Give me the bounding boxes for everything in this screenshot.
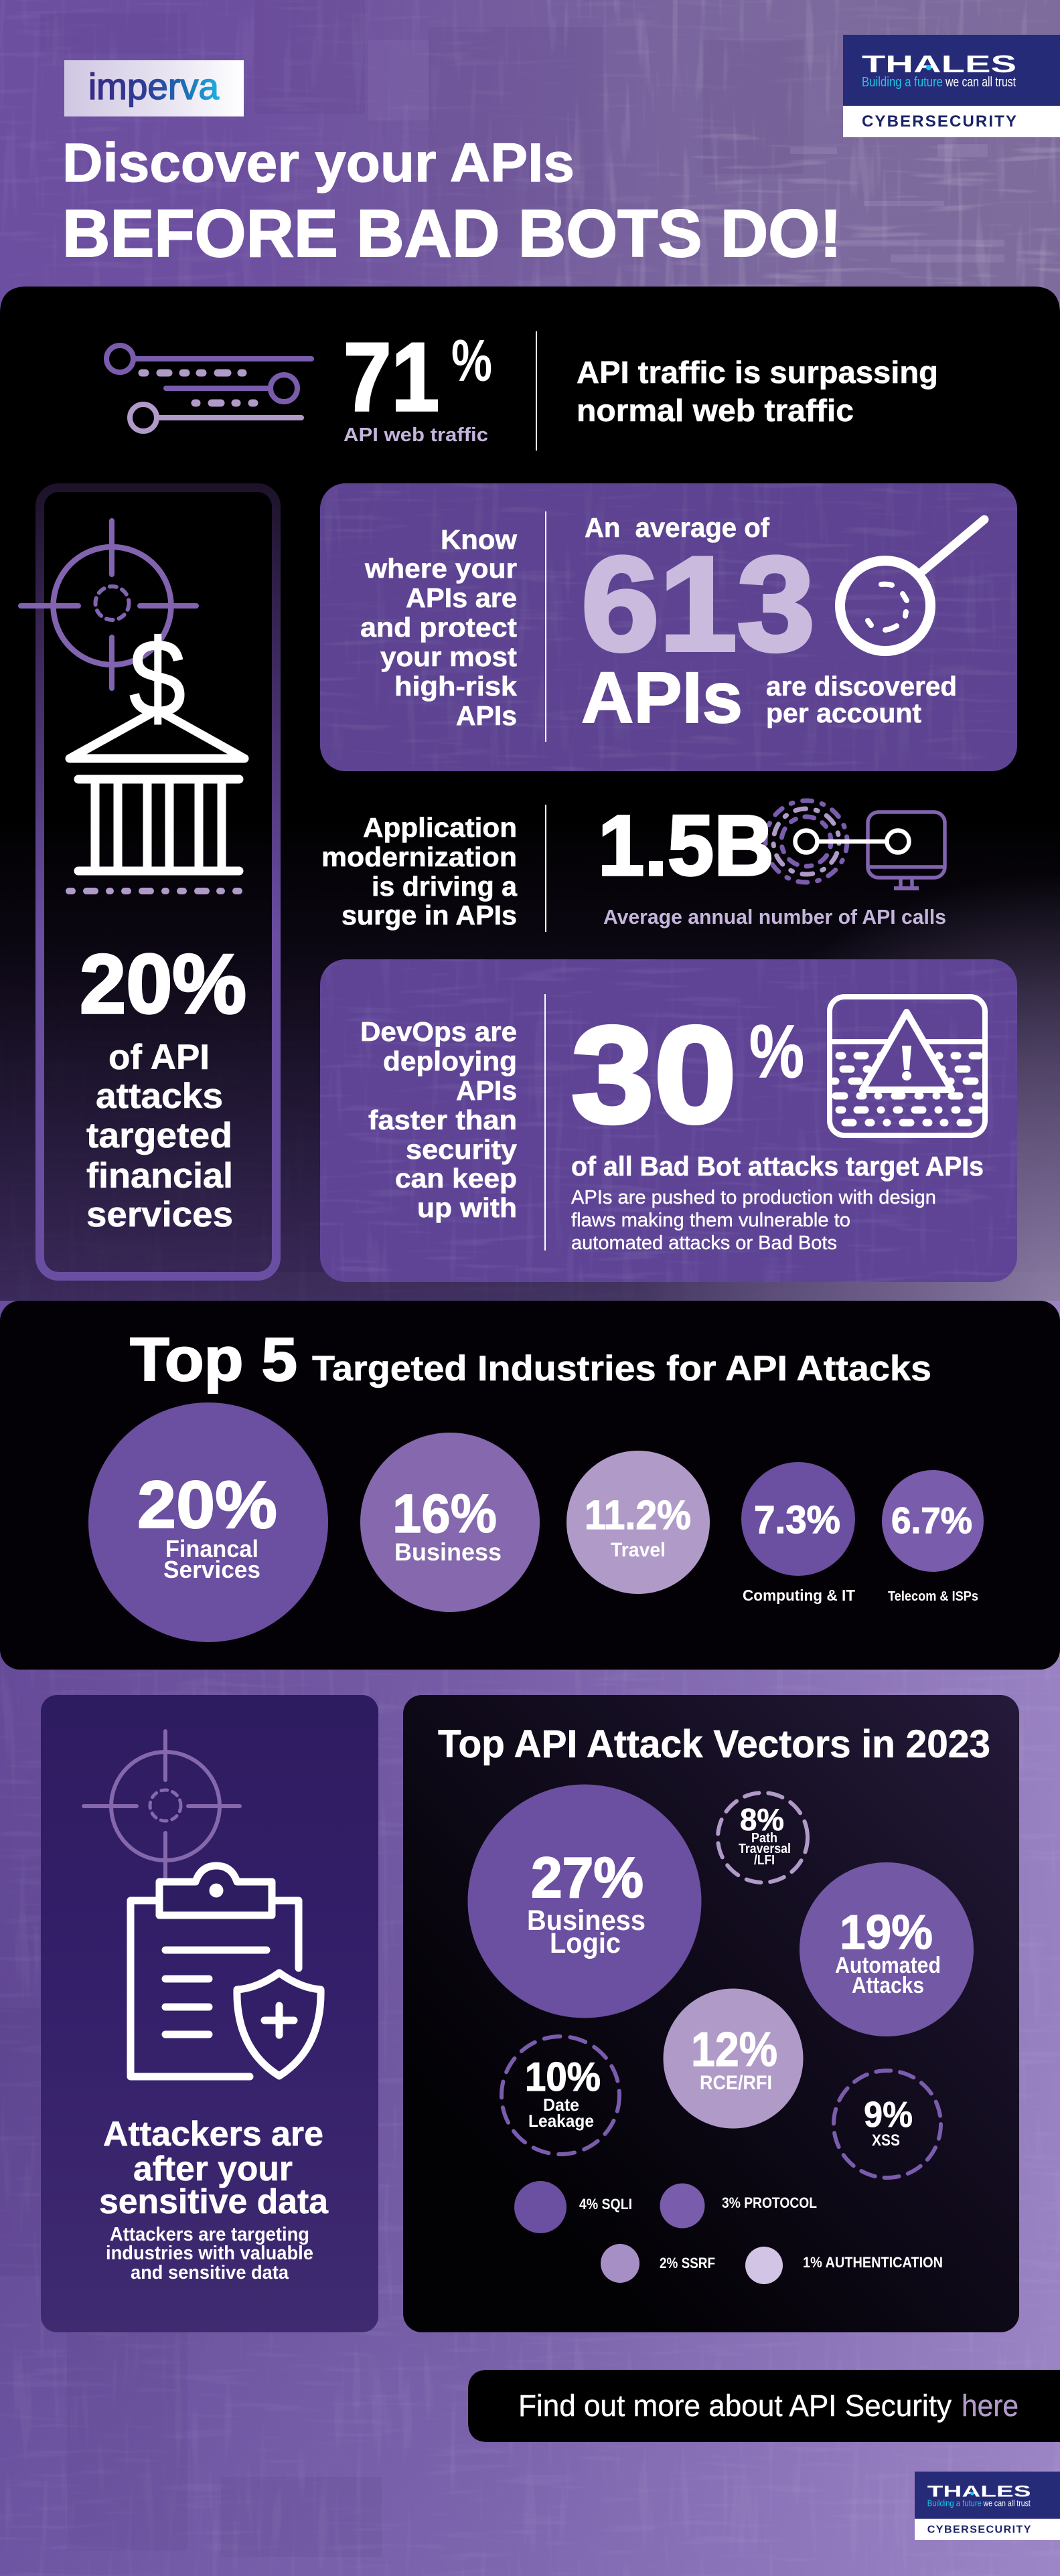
- circle: 6.7% telecom and ISPs: 6.7%: [891, 1500, 972, 1541]
- circle: 9% XSS: 9%: [864, 2095, 913, 2135]
- panel: 20% financial services: attacks: [96, 1076, 223, 1116]
- text: APIs pushed with design flaws: APIs are pushed to production with design: [571, 1187, 936, 1208]
- logo: Thales footer: Building a future: [927, 2498, 982, 2508]
- text: know where your APIs are: APIs: [456, 700, 517, 731]
- circle: 7.3% computing and IT: Computing & IT: [743, 1587, 855, 1604]
- text: know where your APIs are: high-risk: [394, 671, 517, 702]
- call to action: [468, 2370, 1060, 2442]
- stat: 71% API web traffic: API web traffic: [344, 424, 488, 446]
- row: 1.5B API calls: surge in APIs: [342, 900, 517, 931]
- stat: 71% API web traffic: API traffic is surpassing: [577, 355, 938, 390]
- legend: smaller vectors: 2% SSRF: [660, 2255, 715, 2271]
- stat: 71% API web traffic: normal web traffic: [577, 393, 854, 428]
- title: BEFORE BAD BOTS DO!: [62, 196, 842, 271]
- circle: 20% financial services: Services: [163, 1556, 260, 1583]
- panel: 613 APIs discovered: APIs: [581, 657, 743, 738]
- circle: 16% business: Business: [394, 1538, 502, 1566]
- panel: 613 APIs discovered: are discovered: [766, 671, 957, 702]
- logo: Thales footer: [915, 2472, 1060, 2540]
- circle: 10% data leakage: Date: [543, 2095, 579, 2115]
- panel: attackers sensitive data: [41, 1695, 378, 2332]
- heading: top 5: Targeted Industries for API Attacks: [312, 1349, 931, 1388]
- panel: attackers sensitive data: and sensitive data: [131, 2262, 289, 2283]
- circle: 8% path traversal: 8%: [740, 1802, 784, 1837]
- logo: Thales footer: THALES: [927, 2482, 1031, 2500]
- icon: clipboard with shield: [131, 1866, 321, 2077]
- circle: 20% financial services: Financal: [165, 1535, 258, 1562]
- logo: Thales cybersecurity: THALES: [862, 50, 1016, 78]
- text: devops are deploying: APIs: [456, 1075, 517, 1106]
- panel: top API attack vectors: Top API Attack Vectors in 2023: [438, 1722, 990, 1766]
- circle: 20% financial services: 20%: [137, 1467, 277, 1542]
- panel: 20% financial services: of API: [108, 1038, 210, 1077]
- panel: attackers sensitive data: Attackers are targeting: [110, 2224, 309, 2245]
- legend: smaller vectors: 4% SQLI: [579, 2196, 632, 2212]
- circle: 10% data leakage: 10%: [525, 2055, 601, 2099]
- panel: 20% financial services: [21, 487, 276, 1276]
- circle: 8% path traversal: /LFI: [754, 1853, 775, 1868]
- circle: 19% automated attacks: Automated: [835, 1953, 941, 1978]
- panel: 30% bad bot attacks: %: [749, 1010, 804, 1093]
- row: 1.5B API calls: [321, 798, 946, 932]
- icon: bank with dollar: $: [129, 617, 185, 740]
- circle: 10% data leakage: Leakage: [528, 2111, 594, 2131]
- panel: 613 APIs discovered: 613: [581, 530, 815, 679]
- circle: 9% XSS: XSS: [872, 2131, 900, 2150]
- text: devops are deploying: faster than: [368, 1105, 517, 1135]
- circle: 6.7% telecom and ISPs: Telecom & ISPs: [888, 1589, 978, 1604]
- logo: Thales cybersecurity: Building a future: [862, 75, 943, 90]
- panel: 30% bad bot attacks: [320, 959, 1017, 1282]
- row: 1.5B API calls: is driving a: [372, 871, 518, 902]
- circle: 10% data leakage: [502, 2036, 619, 2154]
- text: devops are deploying: security: [406, 1134, 517, 1165]
- panel: attackers sensitive data: industries with valuable: [106, 2243, 313, 2264]
- panel: attackers sensitive data: after your: [133, 2150, 293, 2188]
- circle: 20% financial services: [88, 1402, 328, 1642]
- panel: top 5 targeted industries: [0, 1301, 1060, 1670]
- logo: imperva: imperva: [88, 66, 219, 107]
- circle: 27% business logic: Logic: [550, 1927, 621, 1959]
- legend: smaller vectors: 3% PROTOCOL: [722, 2194, 817, 2211]
- legend: smaller vectors: 1% AUTHENTICATION: [803, 2254, 943, 2271]
- circle: 19% automated attacks: Attacks: [852, 1973, 924, 1998]
- circle: 8% path traversal: Traversal: [739, 1842, 791, 1856]
- stat: 71% API web traffic: 71: [344, 323, 439, 431]
- circle: 11.2% travel: 11.2%: [585, 1492, 691, 1538]
- logo: Thales footer: we can all trust: [983, 2498, 1031, 2508]
- text: APIs pushed with design flaws: [571, 1187, 936, 1254]
- panel: 20% financial services: 20%: [80, 938, 246, 1031]
- text: devops are deploying: [360, 1016, 517, 1223]
- panel: attackers sensitive data: sensitive data: [99, 2182, 329, 2221]
- circle: 27% business logic: Business: [527, 1905, 646, 1937]
- circle: 6.7% telecom and ISPs: [882, 1470, 984, 1604]
- icon: network to monitor: [765, 801, 945, 888]
- panel: 20% financial services: targeted: [86, 1116, 232, 1155]
- logo: Thales cybersecurity: we can all trust: [945, 75, 1016, 90]
- text: know where your APIs are: and protect: [360, 612, 517, 643]
- logo: Thales cybersecurity: [843, 35, 1060, 137]
- text: know where your APIs are: [360, 524, 517, 731]
- panel: 30% bad bot attacks: 30: [571, 998, 737, 1151]
- text: devops are deploying: deploying: [383, 1046, 517, 1076]
- panel: 20% financial services: services: [86, 1195, 233, 1234]
- circle: 11.2% travel: Travel: [611, 1539, 666, 1561]
- panel: 30% bad bot attacks: of all Bad Bot attacks target APIs: [571, 1151, 984, 1182]
- icon: magnifier: [840, 519, 984, 651]
- text: APIs pushed with design flaws: automated attacks or Bad Bots: [571, 1232, 837, 1254]
- icon: data connectors: [106, 345, 311, 431]
- icon: warning over code window: [830, 997, 985, 1135]
- circle: 16% business: 16%: [392, 1483, 497, 1544]
- panel: 613 APIs discovered: An average of: [585, 512, 769, 543]
- call to action: here: [962, 2389, 1018, 2423]
- circle: 9% XSS: [834, 2071, 941, 2178]
- heading: top 5: Top 5: [130, 1325, 297, 1394]
- circle: 19% automated attacks: 19%: [840, 1906, 933, 1959]
- circle: 7.3% computing and IT: [741, 1462, 855, 1604]
- stat: 71% API web traffic: [106, 323, 938, 451]
- panel: top black section: [0, 287, 1060, 1301]
- title: [62, 133, 842, 271]
- icon: bank with dollar: [69, 617, 244, 891]
- lower right glow of top section: [603, 870, 1060, 1301]
- panel: attackers sensitive data: Attackers are: [103, 2115, 323, 2154]
- circle: 16% business: [360, 1433, 540, 1612]
- circle: 12% RCE/RFI: [663, 1988, 804, 2129]
- circle: 12% RCE/RFI: RCE/RFI: [700, 2072, 772, 2094]
- row: 1.5B API calls: Average annual number of API calls: [603, 905, 946, 929]
- heading: top 5: [130, 1325, 931, 1394]
- icon: crosshair target: [21, 521, 196, 688]
- text: devops are deploying: up with: [417, 1192, 517, 1223]
- circle: 7.3% computing and IT: 7.3%: [754, 1498, 840, 1542]
- text: know where your APIs are: Know: [441, 524, 517, 555]
- logo: imperva: [64, 60, 244, 116]
- text: know where your APIs are: APIs are: [406, 582, 517, 613]
- panel: 613 APIs discovered: per account: [766, 698, 921, 728]
- panel: 20% financial services: financial: [86, 1156, 233, 1196]
- circle: 11.2% travel: [566, 1451, 710, 1594]
- text: devops are deploying: can keep: [395, 1163, 517, 1194]
- row: 1.5B API calls: Application: [363, 812, 517, 843]
- title: Discover your APIs: [62, 133, 575, 193]
- circle: 27% business logic: [467, 1785, 702, 2018]
- text: know where your APIs are: your most: [380, 641, 517, 672]
- row: 1.5B API calls: modernization: [321, 841, 517, 872]
- panel: top API attack vectors: [403, 1695, 1019, 2332]
- row: 1.5B API calls: 1.5B: [598, 798, 774, 894]
- icon: crosshair target: [84, 1731, 240, 1895]
- text: devops are deploying: DevOps are: [360, 1016, 517, 1047]
- circle: 19% automated attacks: [800, 1862, 974, 2036]
- panel: 613 APIs discovered: [320, 483, 1017, 771]
- text: APIs pushed with design flaws: flaws making them vulnerable to: [571, 1210, 850, 1231]
- logo: Thales footer: CYBERSECURITY: [927, 2523, 1031, 2535]
- legend: smaller vectors: [514, 2181, 943, 2284]
- circle: 8% path traversal: [718, 1793, 808, 1882]
- text: know where your APIs are: where your: [364, 553, 517, 584]
- circle: 12% RCE/RFI: 12%: [691, 2023, 777, 2077]
- circle: 27% business logic: 27%: [531, 1846, 643, 1910]
- call to action: Find out more about API Security: [518, 2389, 952, 2423]
- circle: 8% path traversal: Path: [751, 1831, 777, 1846]
- stat: 71% API web traffic: %: [451, 327, 492, 394]
- logo: Thales cybersecurity: CYBERSECURITY: [862, 112, 1016, 131]
